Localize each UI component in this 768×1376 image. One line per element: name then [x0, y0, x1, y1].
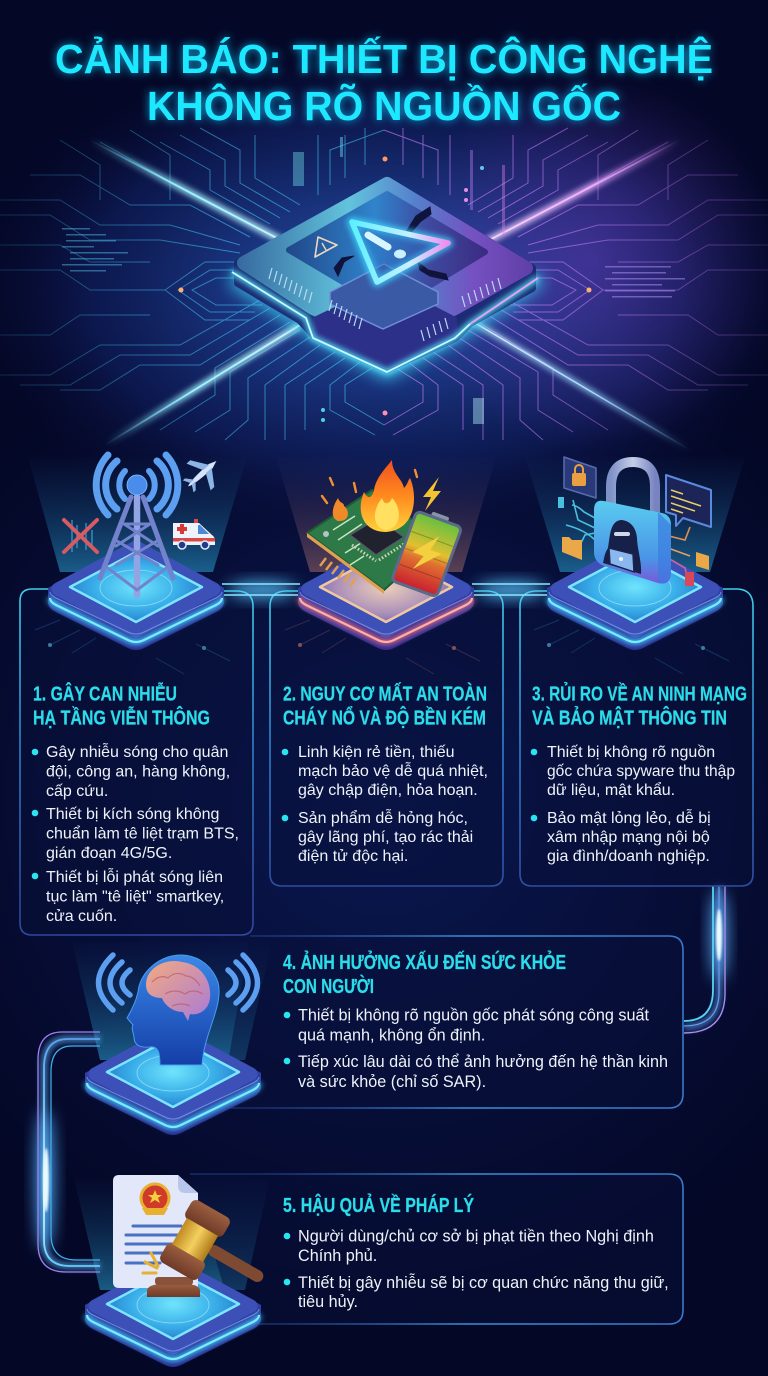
icon: red cross mark [64, 520, 97, 552]
cracks [334, 207, 448, 280]
panel 2 bullets [282, 744, 488, 865]
platform 3 with padlock [547, 457, 723, 650]
panel 1 bullets: chuẩn làm tê liệt trạm BTS, [46, 824, 239, 842]
panel 3 heading: VÀ BẢO MẬT THÔNG TIN [532, 706, 727, 730]
warning triangle [352, 222, 448, 282]
circuit board backdrop [0, 128, 768, 450]
panel 5 frame [190, 1174, 683, 1324]
panel 1 bullets: Gây nhiễu sóng cho quân [46, 742, 228, 761]
panel 2 bullets: Sản phẩm dễ hỏng hóc, [298, 808, 468, 827]
platform shadow traces [35, 620, 729, 674]
icon: document [113, 1175, 198, 1288]
panel 2 bullets: điện tử độc hại. [298, 848, 408, 865]
icon: padlock [594, 462, 671, 584]
icon: battery [391, 506, 464, 597]
panel 1 frame [20, 589, 253, 935]
panel 3 bullets: Bảo mật lỏng lẻo, dễ bị [547, 808, 711, 827]
panel 1 bullets: Thiết bị lỗi phát sóng liên [46, 867, 223, 886]
panel 2 bullets: Linh kiện rẻ tiền, thiếu [298, 744, 455, 761]
panel 4 bullets: Tiếp xúc lâu dài có thể ảnh hưởng đến hệ thần kinh [298, 1053, 668, 1071]
panel 4 bullets: quá mạnh, không ổn định. [298, 1026, 485, 1044]
connector: panel 3 to panel 4 [684, 886, 726, 1033]
platform 5 [85, 1257, 261, 1367]
connector: panel 4 to panel 5 [37, 1032, 100, 1272]
chip pins [269, 268, 501, 341]
panel 4 heading: CON NGƯỜI [283, 974, 374, 998]
title [55, 36, 713, 129]
panel 1 heading: HẠ TẦNG VIỄN THÔNG [33, 706, 210, 730]
panel 5 [190, 1174, 683, 1324]
icon: brain [146, 961, 210, 1021]
chip glow [232, 278, 540, 372]
panel 3 heading [532, 682, 747, 730]
panel 2 heading [283, 682, 487, 730]
icon: gavel [147, 1198, 281, 1310]
panel 1 bullets: cửa cuốn. [46, 908, 117, 925]
panel 4 bullets: và sức khỏe (chỉ số SAR). [298, 1073, 486, 1091]
small warning triangle [315, 237, 337, 257]
panel 5 heading: 5. HẬU QUẢ VỀ PHÁP LÝ [283, 1193, 475, 1217]
panel 3 bullets: gốc chứa spyware thu thập [547, 763, 735, 780]
panel 4 bullets: Thiết bị không rõ nguồn gốc phát sóng công suất [298, 1006, 649, 1024]
platform 4 with head [85, 955, 261, 1135]
panel 2 heading: 2. NGUY CƠ MẤT AN TOÀN [283, 682, 487, 706]
icon: code window [666, 475, 711, 527]
central chip illustration [232, 180, 540, 372]
panel 1 [20, 589, 253, 935]
panel 2 bullets: mạch bảo vệ dễ quá nhiệt, [298, 761, 488, 780]
panel 3 [520, 589, 753, 886]
panel 2 bullets: gây lãng phí, tạo rác thải [298, 829, 473, 846]
panel 5 bullets [284, 1228, 669, 1311]
platform 2 [298, 540, 474, 650]
panel 4 bullets [284, 1006, 668, 1091]
front block [317, 264, 453, 366]
circuit traces [0, 128, 768, 440]
panel 1 heading [33, 682, 210, 730]
icon: human head [127, 955, 219, 1065]
platform 2 with burning circuit and battery [298, 460, 474, 650]
icon: lightning bolt [423, 477, 441, 511]
panel 3 bullets [531, 744, 735, 865]
panel 2 frame [270, 591, 503, 886]
panel 1 bullets: gián đoạn 4G/5G. [46, 845, 172, 862]
panel 4 [220, 936, 683, 1108]
platform 4 [85, 1025, 261, 1135]
panel 2 bullets: gây chập điện, hỏa hoạn. [298, 782, 478, 799]
icon: signal waves [96, 455, 178, 515]
platform 1 [48, 540, 224, 650]
icon: flames [322, 460, 417, 532]
panel 3 bullets: gia đình/doanh nghiệp. [547, 848, 710, 865]
chip inner face [289, 194, 485, 310]
platform 1 with tower [48, 448, 228, 650]
platform 5 with legal document [85, 1175, 281, 1367]
icon: tower [100, 475, 173, 595]
panel 5 bullets: Chính phủ. [298, 1247, 377, 1265]
panel 3 bullets: xâm nhập mạng nội bộ [547, 829, 710, 846]
platform 3 [547, 540, 723, 650]
panel 5 bullets: Thiết bị gây nhiễu sẽ bị cơ quan chức năng thu giữ, [298, 1273, 669, 1292]
light rays [90, 140, 690, 450]
icon: airplane [176, 448, 228, 500]
icon: small lock card [564, 457, 596, 498]
icon: brain waves [98, 955, 258, 1010]
panel 1 bullets: cấp cứu. [46, 783, 108, 800]
panel 2 [270, 591, 503, 886]
icon: data wires and files [558, 497, 709, 586]
light beams [28, 457, 745, 1290]
title: KHÔNG RÕ NGUỒN GỐC [147, 83, 621, 129]
panel 1 bullets: đội, công an, hàng không, [46, 764, 230, 780]
icon: national emblem [141, 1184, 169, 1215]
panel 1 bullets: Thiết bị kích sóng không [46, 806, 219, 823]
panel 4 heading: 4. ẢNH HƯỞNG XẤU ĐẾN SỨC KHỎE [283, 950, 566, 974]
icon: ambulance [173, 519, 215, 549]
chip outline glow [232, 272, 538, 372]
panel 4 heading [283, 950, 566, 998]
icon: circuit board [307, 490, 440, 594]
panel 5 bullets: tiêu hủy. [298, 1293, 358, 1311]
panel 3 bullets: Thiết bị không rõ nguồn [547, 744, 715, 761]
panel 5 bullets: Người dùng/chủ cơ sở bị phạt tiền theo Nghị định [298, 1228, 654, 1246]
data bars and code dashes [62, 137, 685, 424]
icon: hacker [603, 520, 641, 574]
panel 1 bullets [32, 742, 239, 925]
chip base [238, 180, 532, 369]
panel 1 bullets: tục làm "tê liệt" smartkey, [46, 888, 224, 906]
panel 3 frame [520, 589, 753, 886]
connector: top row glow [222, 583, 550, 597]
chip top face [244, 184, 526, 342]
panel 4 frame [220, 936, 683, 1108]
panel 1 heading: 1. GÂY CAN NHIỄU [33, 682, 177, 706]
panel 2 heading: CHÁY NỔ VÀ ĐỘ BỀN KÉM [283, 706, 486, 730]
panel 3 bullets: dữ liệu, mật khẩu. [547, 781, 675, 799]
title: CẢNH BÁO: THIẾT BỊ CÔNG NGHỆ [55, 36, 713, 82]
